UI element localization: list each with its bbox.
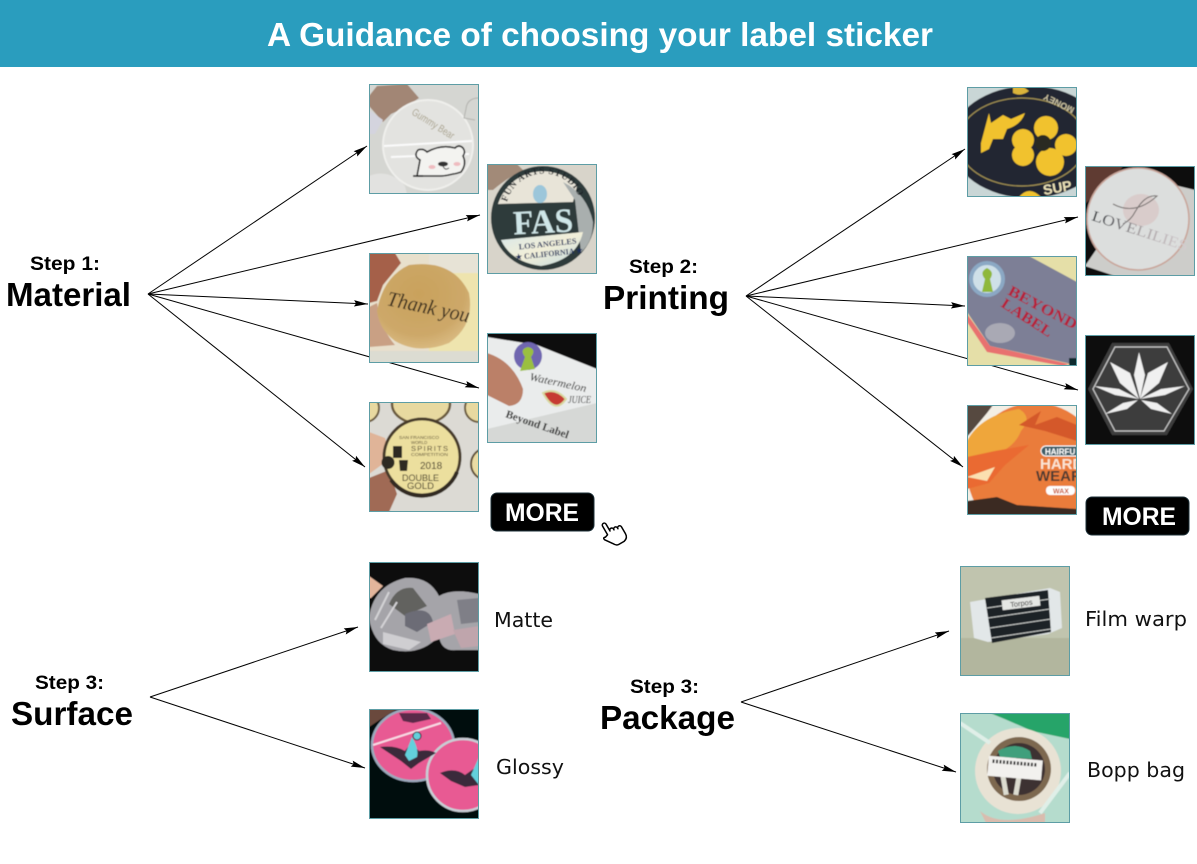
MORE button: material: MORE [505, 499, 579, 527]
photo: clear lovelilies sticker: LOVELILIES [1090, 209, 1190, 255]
photo: orange hair wax sticker: WEAR [1036, 468, 1082, 485]
step 3 heading: surface: Step 3: [35, 672, 104, 694]
photo: watermelon juice sticker [487, 333, 597, 443]
photo: gold foil flower sticker: MONEY [1042, 92, 1076, 115]
step 3 heading: package [600, 676, 735, 736]
step 3 heading: surface: Surface [11, 695, 133, 732]
label: bopp bag: Bopp bag [1087, 758, 1185, 782]
header banner [0, 0, 1197, 67]
photo: gold double gold sticker: WORLD [411, 440, 427, 445]
arrows: surface [150, 627, 365, 768]
step 3 heading: surface [11, 672, 133, 732]
photo: gold foil flower sticker [967, 87, 1077, 197]
title: A Guidance of choosing your label sticker [267, 16, 933, 53]
photo: watermelon juice sticker: Watermelon [528, 371, 588, 395]
step 1 heading: material: Material [6, 276, 131, 313]
photo: film wrap roll [960, 566, 1070, 676]
step 3 heading: package: Step 3: [630, 676, 699, 698]
photo: watermelon juice sticker: JUICE [568, 395, 591, 406]
step 2 heading: printing [603, 256, 729, 316]
label: matte: Matte [494, 608, 553, 632]
photo: glossy pink sticker [369, 709, 479, 819]
photo: hexagon leaf sticker [1085, 335, 1195, 445]
step 2 heading: printing: Step 2: [629, 256, 698, 278]
step 1 heading: material [6, 253, 131, 313]
photo: gold double gold sticker: GOLD [407, 481, 435, 491]
photo: orange hair wax sticker: WAX [1053, 488, 1069, 496]
MORE button: printing: MORE [1102, 503, 1176, 531]
MORE button: printing [1086, 497, 1189, 535]
photo: gold foil flower sticker: SUP [1042, 177, 1073, 198]
photo: gold double gold sticker [369, 402, 479, 512]
photo: film wrap roll: Torpos [1010, 598, 1033, 609]
photo: bopp bag roll [960, 713, 1070, 823]
step 3 heading: package: Package [600, 699, 735, 736]
photo: beyond label red foil sticker: LABEL [998, 296, 1055, 341]
photo: matte sticker [369, 562, 479, 672]
photo: clear holographic bear sticker: Gummy Bear [409, 106, 457, 142]
photo: FAS holographic sticker [487, 164, 597, 274]
photo: clear holographic bear sticker [369, 84, 479, 194]
photo: gold double gold sticker: SPIRITS [411, 444, 448, 453]
photo: FAS holographic sticker: ★ CALIFORNIA ★ [515, 246, 584, 262]
label: glossy: Glossy [496, 755, 564, 779]
photo: kraft thank you sticker: Thank you [385, 286, 472, 327]
photo: orange hair wax sticker [967, 405, 1077, 515]
step 2 heading: printing: Printing [603, 279, 729, 316]
arrows: package [741, 631, 956, 772]
photo: orange hair wax sticker: HARD [1040, 456, 1083, 473]
label: film warp: Film warp [1085, 607, 1187, 631]
step 1 heading: material: Step 1: [30, 253, 100, 275]
photo: kraft thank you sticker [369, 253, 479, 363]
MORE button: material [491, 493, 594, 531]
arrows: printing [746, 149, 1078, 467]
icon: pointing hand cursor [597, 516, 628, 550]
photo: watermelon juice sticker: Beyond Label [504, 408, 570, 441]
photo: beyond label red foil sticker: BEYOND [1005, 283, 1080, 333]
photo: gold double gold sticker: COMPETITION [411, 452, 448, 457]
photo: orange hair wax sticker: HAIRFU [1045, 448, 1075, 456]
photo: FAS holographic sticker: FUN ARTS STUDIO [500, 168, 583, 202]
photo: gold double gold sticker: DOUBLE [402, 473, 439, 483]
photo: FAS holographic sticker: LOS ANGELES [518, 236, 577, 252]
photo: beyond label red foil sticker [967, 256, 1080, 366]
arrows: material [148, 146, 480, 467]
photo: gold double gold sticker: SAN FRANCISCO [399, 435, 439, 440]
photo: clear lovelilies sticker [1085, 166, 1195, 276]
photo: gold double gold sticker: 2018 [420, 461, 443, 472]
photo: FAS holographic sticker: FAS [512, 202, 574, 243]
